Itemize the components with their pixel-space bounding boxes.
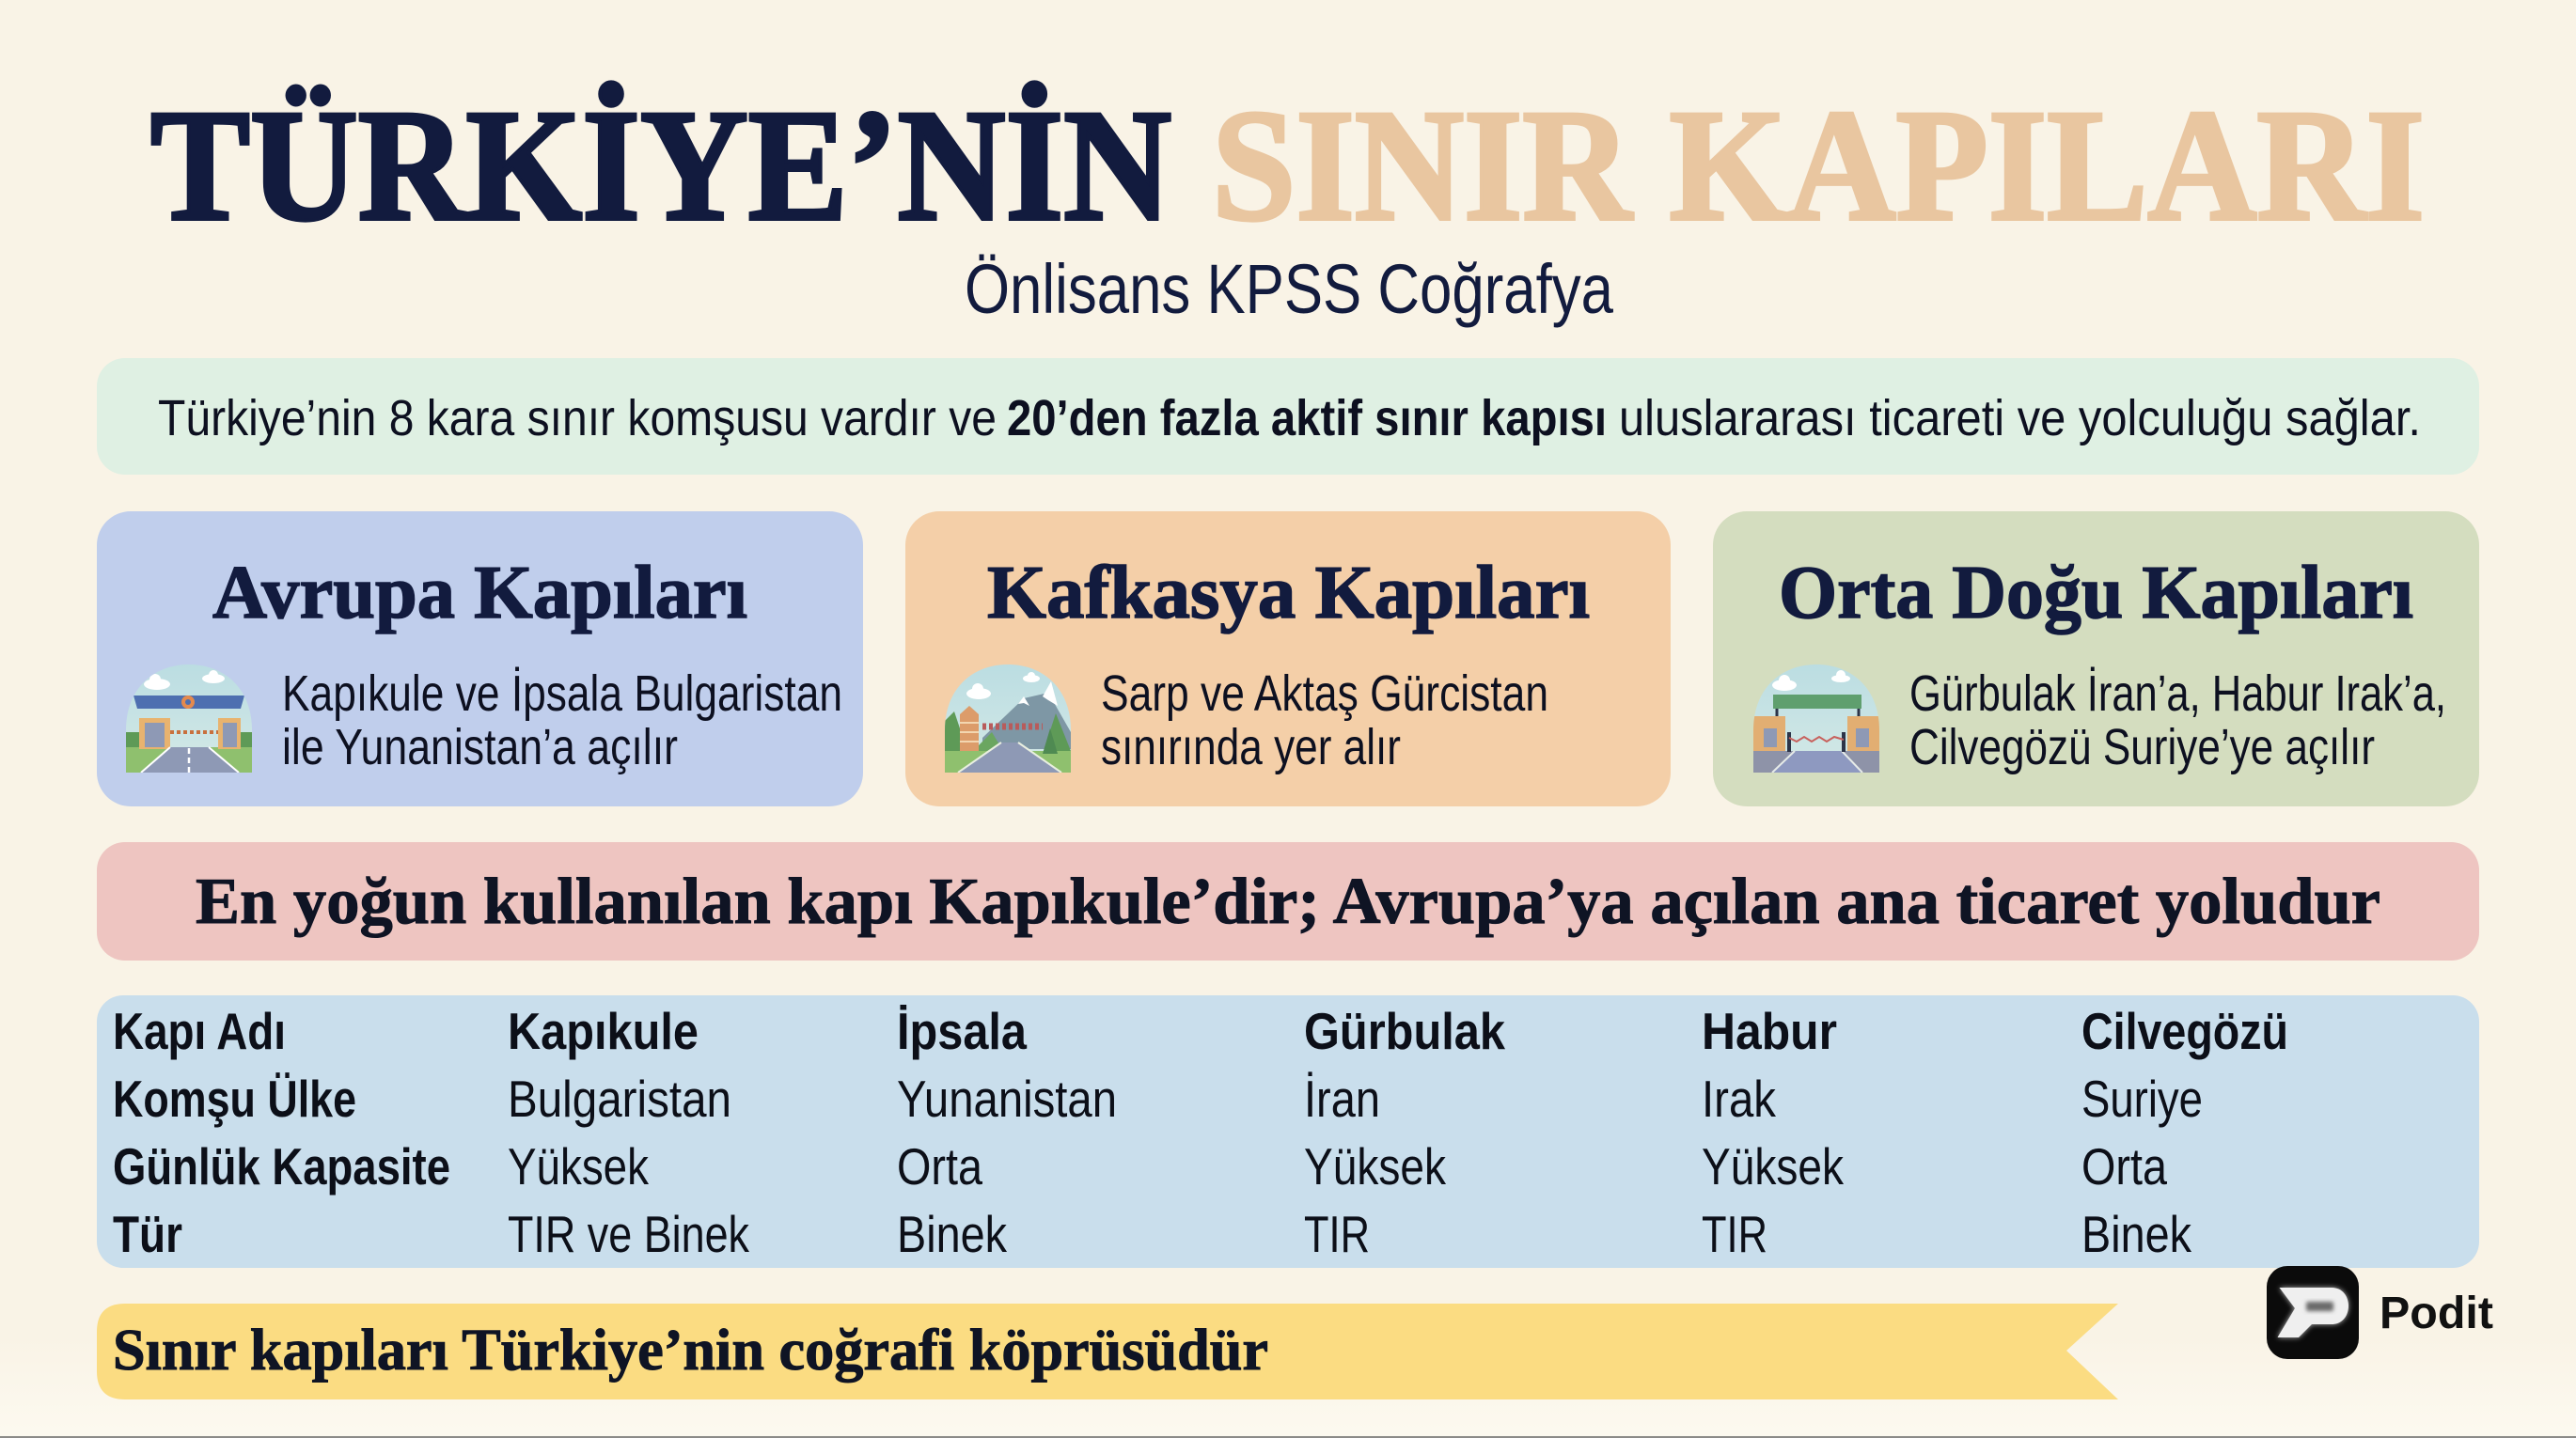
- table column: Kapıkule: Bulgaristan: [508, 1070, 731, 1128]
- table column: Habur: [1702, 1002, 1844, 1263]
- text: Kafkasya description: sınırında yer alır: [1101, 719, 1401, 775]
- intro banner: 20’den fazla aktif sınır kapısı: [1007, 390, 1607, 446]
- table column: Habur: Habur: [1702, 1002, 1837, 1060]
- heading: Avrupa Kapıları: Avrupa Kapıları: [212, 552, 747, 634]
- text: Kafkasya description: Sarp ve Aktaş Gürcistan: [1101, 665, 1548, 722]
- table column: Cilvegözü: Binek: [2081, 1205, 2191, 1263]
- title: TÜRKİYE’NİN: [150, 77, 1171, 254]
- table column: Kapıkule: TIR ve Binek: [508, 1205, 749, 1263]
- callout: Kapıkule: En yoğun kullanılan kapı Kapıkule’dir; Avrupa’ya açılan ana ticaret yoludur: [196, 866, 2380, 938]
- panel: Kafkasya Kapıları: [905, 511, 1671, 806]
- panel: Orta Doğu Kapıları: [1713, 511, 2479, 806]
- table column: row labels: Kapı Adı: [113, 1002, 286, 1060]
- table: border gates: [97, 995, 2479, 1268]
- heading: Orta Doğu Kapıları: Orta Doğu Kapıları: [1779, 552, 2413, 634]
- table column: Kapıkule: [508, 1002, 749, 1263]
- table column: Kapıkule: Yüksek: [508, 1137, 649, 1196]
- icon: Sarp mountain gate: [945, 664, 1071, 773]
- table column: Habur: TIR: [1702, 1205, 1767, 1263]
- table column: Gürbulak: Yüksek: [1304, 1137, 1446, 1196]
- table column: Cilvegözü: Cilvegözü: [2081, 1002, 2288, 1060]
- table column: İpsala: Yunanistan: [897, 1070, 1117, 1128]
- logo: Podit icon: [2267, 1266, 2359, 1359]
- table column: Cilvegözü: Suriye: [2081, 1070, 2203, 1128]
- table column: İpsala: Binek: [897, 1205, 1007, 1263]
- table column: Gürbulak: Gürbulak: [1304, 1002, 1505, 1060]
- table column: İpsala: İpsala: [897, 1002, 1027, 1060]
- bottom edge line: [0, 1436, 2576, 1438]
- heading: Kafkasya Kapıları: Kafkasya Kapıları: [987, 552, 1590, 634]
- table column: Cilvegözü: Orta: [2081, 1137, 2167, 1196]
- title: SINIR KAPILARI: [1212, 77, 2425, 254]
- callout: Kapıkule: [97, 842, 2479, 961]
- table column: Gürbulak: TIR: [1304, 1205, 1370, 1263]
- text: Avrupa description: Kapıkule ve İpsala Bulgaristan: [282, 665, 842, 722]
- icon: Kapıkule border gate: [126, 664, 252, 773]
- table column: Gürbulak: İran: [1304, 1070, 1380, 1128]
- table column: Habur: Yüksek: [1702, 1137, 1844, 1196]
- intro banner: Türkiye’nin 8 kara sınır komşusu vardır ve: [158, 390, 997, 446]
- title: [150, 77, 2425, 254]
- text: Avrupa description: [282, 665, 842, 775]
- table column: Kapıkule: Kapıkule: [508, 1002, 699, 1060]
- text: Avrupa description: ile Yunanistan’a açılır: [282, 719, 678, 775]
- logo: Podit wordmark: Podit: [2380, 1289, 2493, 1338]
- table column: Habur: Irak: [1702, 1070, 1776, 1128]
- intro banner: uluslararası ticareti ve yolculuğu sağlar.: [1619, 390, 2421, 446]
- subtitle: Önlisans KPSS Coğrafya: [965, 250, 1614, 328]
- table column: Gürbulak: [1304, 1002, 1505, 1263]
- icon: Middle East border gate: [1753, 664, 1879, 773]
- text: Kafkasya description: [1101, 665, 1548, 775]
- table column: row labels: Komşu Ülke: [113, 1070, 356, 1128]
- table column: row labels: [113, 1002, 450, 1263]
- table column: row labels: Günlük Kapasite: [113, 1137, 450, 1196]
- intro banner: [97, 358, 2479, 475]
- table column: row labels: Tür: [113, 1205, 182, 1263]
- text: Orta Doğu description: [1909, 665, 2446, 775]
- ribbon: closing statement: Sınır kapıları Türkiye’nin coğrafi köprüsüdür: [113, 1319, 1268, 1383]
- panel: Avrupa Kapıları: [97, 511, 863, 806]
- table column: İpsala: [897, 1002, 1117, 1263]
- table column: Cilvegözü: [2081, 1002, 2288, 1263]
- text: Orta Doğu description: Cilvegözü Suriye’ye açılır: [1909, 719, 2375, 775]
- table column: İpsala: Orta: [897, 1137, 982, 1196]
- text: Orta Doğu description: Gürbulak İran’a, Habur Irak’a,: [1909, 665, 2446, 722]
- ribbon: closing statement: [97, 1304, 2118, 1399]
